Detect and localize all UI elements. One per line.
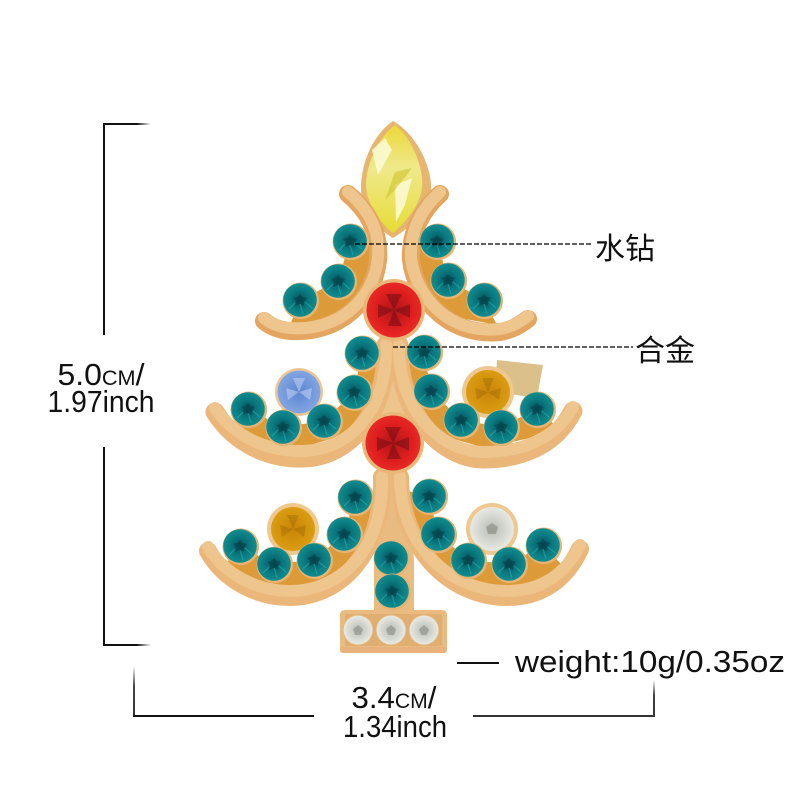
clip tab behind tree [495, 360, 543, 398]
width label inch: 1.34inch [343, 709, 447, 744]
weight leader [457, 662, 499, 664]
height label inch: 1.97inch [48, 384, 154, 419]
rhinestone leader [355, 243, 592, 245]
gold backing of tiers [225, 241, 562, 590]
height bracket [103, 123, 151, 646]
width bracket [133, 666, 655, 717]
brooch: Christmas tree [208, 121, 580, 653]
middle tier gold arcs [215, 345, 573, 459]
trunk rhinestones [374, 540, 411, 610]
centre gold between middle arms [376, 375, 412, 425]
width label: 3.4CM/ [352, 680, 437, 715]
bottom tier rhinestones [222, 478, 562, 583]
alloy label: 合金 [635, 335, 695, 368]
rhinestone label: 水钻 [595, 233, 655, 266]
marquise yellow top stone [361, 121, 431, 238]
height label: 5.0CM/ [58, 357, 145, 392]
trunk and base [340, 465, 447, 653]
middle tier rhinestones [230, 334, 556, 446]
base clear stones [342, 614, 440, 646]
top tier rhinestones [282, 224, 503, 319]
weight label: weight:10g/0.35oz [514, 644, 785, 679]
alloy leader [393, 346, 633, 348]
red centre stones [362, 279, 425, 474]
top tier gold arcs [264, 192, 528, 332]
bottom tier gold arcs [208, 477, 580, 597]
